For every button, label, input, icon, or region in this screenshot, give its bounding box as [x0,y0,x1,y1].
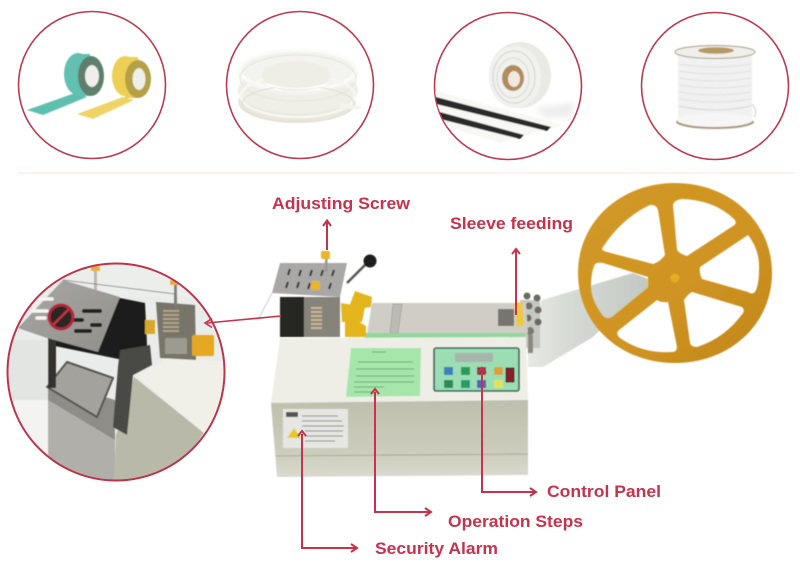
no-hands sign [49,305,73,329]
machine upper body [271,337,528,403]
cutter block [280,297,304,337]
lever and ball [347,263,367,283]
heading: sleeve feeding: Sleeve feeding [450,214,573,233]
leader arrow to detail circle [205,316,281,328]
operation steps sheet [346,348,421,397]
yellow block [192,335,214,356]
spring mechanism [156,302,196,360]
divider [18,172,795,174]
metal lower plate [48,395,115,482]
yellow reel wheel [578,183,772,363]
perforated top plate [272,263,347,297]
warning label [283,409,348,448]
arrow: adjusting screw [323,220,331,250]
green ruler strip [365,333,525,338]
cutting machine [258,251,542,477]
reel support arm [528,273,648,367]
yellow clamp blocks [341,291,372,337]
magnified cutter detail circle [7,263,230,482]
machine rear arm and rollers [520,292,542,353]
display [455,353,493,362]
arrow: sleeve feeding [512,249,520,315]
product circle: wire spool [642,12,788,160]
control panel [434,348,519,391]
cabinet side [114,377,204,482]
heading: control panel: Control Panel [547,482,661,501]
arrow: operation steps [371,389,431,516]
heading: security alarm: Security Alarm [375,539,498,558]
perforated plate [18,280,120,352]
spring [311,308,322,328]
yellow adjusting screws [325,258,328,272]
product circle: white webbing roll [432,12,582,160]
cabinet top [164,358,204,432]
rear dark block [55,298,148,360]
product circle: silicone tubing [226,12,374,158]
metal chute [47,362,113,417]
arrow: security alarm [298,431,357,552]
product circle: coloured tapes [18,12,166,158]
arrow: control panel [478,368,536,496]
heading: operation steps: Operation Steps [448,512,583,531]
dark post [113,345,152,435]
heading: adjusting screw: Adjusting Screw [272,194,411,213]
machine lower band [271,400,528,477]
machine top deck [367,303,528,334]
reel hub pin [670,274,680,282]
